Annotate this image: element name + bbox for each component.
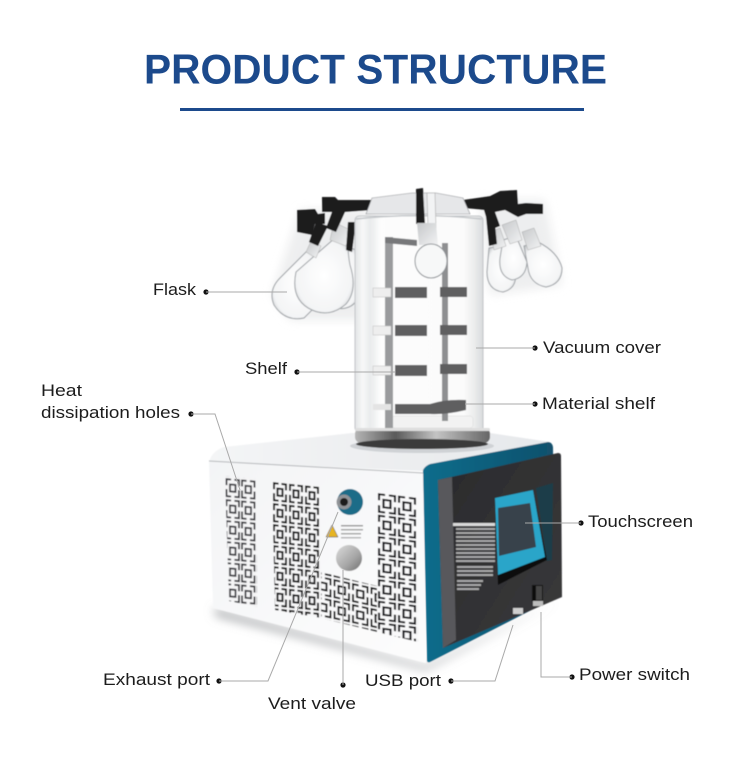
glass cylinder	[355, 216, 483, 432]
vent pattern left	[225, 476, 257, 607]
base ring	[350, 428, 494, 453]
callout: Shelf: Shelf	[245, 359, 287, 378]
callout: Touchscreen	[525, 512, 693, 531]
right flask necks	[490, 220, 541, 250]
callout: Power switch: Power switch	[579, 665, 690, 684]
callout: USB port: USB port	[365, 671, 441, 690]
callout: Heat dissipation holes	[41, 381, 240, 490]
callout: Vacuum cover	[476, 338, 661, 357]
vent valve knob	[336, 545, 362, 571]
teal side	[423, 442, 555, 662]
instruction text on panel	[453, 523, 495, 590]
vent pattern bottom band	[321, 572, 377, 632]
callout: Material shelf	[465, 394, 655, 413]
callout: USB port	[365, 625, 513, 690]
front face	[209, 461, 426, 663]
rack	[373, 237, 448, 429]
callout: Exhaust port: Exhaust port	[103, 670, 210, 689]
warning label	[326, 525, 363, 538]
callout: Vent valve	[268, 570, 356, 713]
usb port	[513, 608, 523, 614]
shelves	[395, 287, 467, 414]
top face	[209, 433, 550, 471]
touchscreen	[495, 490, 545, 575]
callout: Flask: Flask	[153, 280, 197, 299]
left flask necks	[306, 222, 350, 258]
right flasks	[487, 236, 562, 292]
halo behind flasks	[272, 200, 562, 320]
freeze dryer product illustration	[209, 188, 562, 670]
white disc under rack	[392, 416, 473, 428]
left flasks	[272, 238, 360, 319]
callout: Touchscreen: Touchscreen	[588, 512, 693, 531]
callout: Flask	[153, 280, 287, 299]
control panel	[438, 453, 562, 648]
black valves left	[297, 197, 374, 252]
callout: Power switch	[541, 612, 690, 684]
black valves right	[463, 190, 543, 246]
callout: Material shelf: Material shelf	[542, 394, 655, 413]
title underline	[180, 108, 584, 111]
title: PRODUCT STRUCTURE	[144, 46, 607, 92]
callout: Vent valve: Vent valve	[268, 694, 356, 713]
callout: Vacuum cover: Vacuum cover	[543, 338, 661, 357]
vacuum cover with rack and flasks	[272, 188, 562, 453]
vent pattern right column	[377, 492, 418, 642]
callout: Heat dissipation holes: Heat	[41, 381, 82, 400]
callout: Heat dissipation holes: dissipation holes	[41, 403, 180, 422]
machine base	[209, 433, 562, 670]
panel recess	[536, 483, 553, 561]
power switch	[532, 585, 543, 606]
vent pattern centre column	[272, 481, 321, 618]
callout: Shelf	[245, 359, 395, 378]
lid	[366, 193, 470, 214]
exhaust port	[336, 489, 363, 515]
centre flask	[415, 188, 447, 278]
callout: Exhaust port	[103, 512, 338, 689]
